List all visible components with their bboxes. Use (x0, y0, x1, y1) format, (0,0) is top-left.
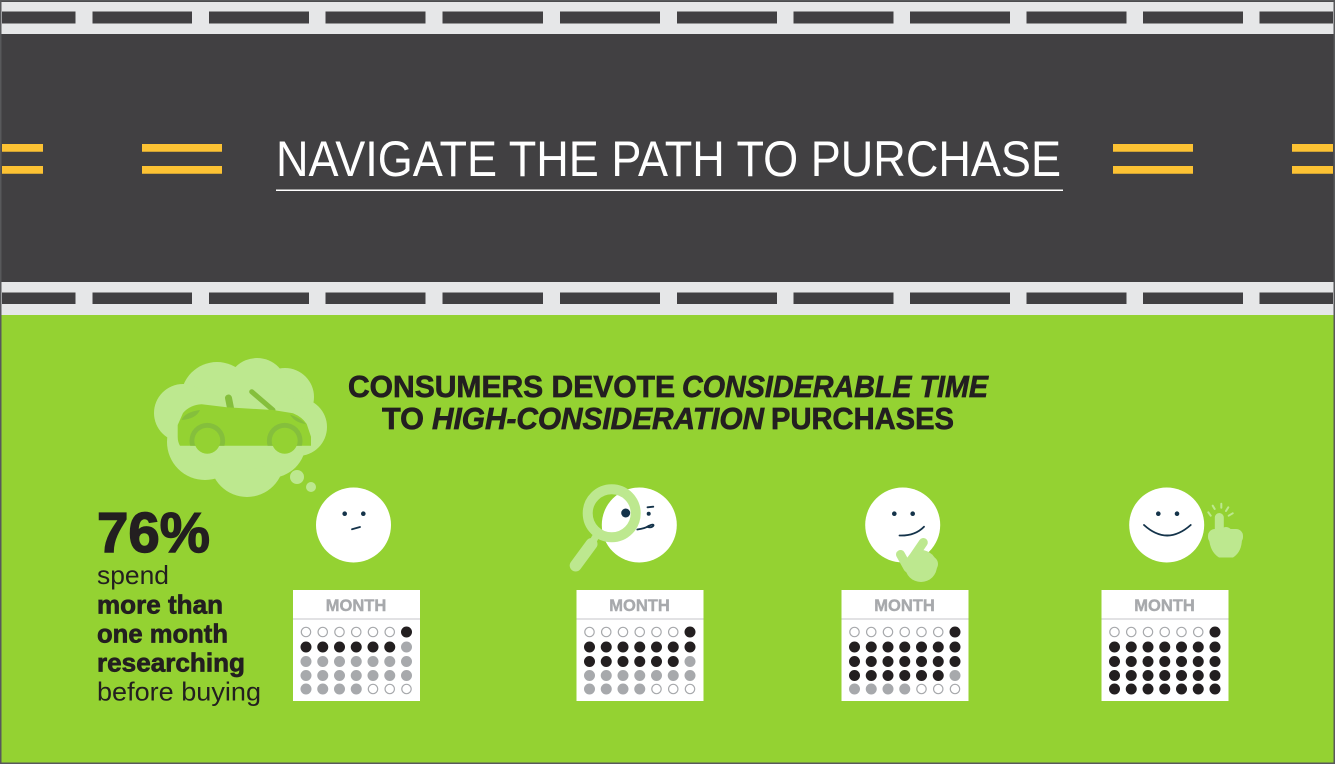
statistic: 76%: one month (97, 618, 228, 648)
top road edge stripe (0, 2, 1335, 34)
calendar 3: MONTH (874, 597, 935, 615)
yellow centre lines (2, 144, 1333, 174)
heading: CONSIDERABLE TIME (682, 369, 989, 404)
green background panel (0, 315, 1335, 764)
calendar 3 (842, 590, 968, 701)
road panel (0, 0, 1335, 315)
calendar 1: MONTH (326, 597, 386, 615)
statistic: 76%: more than (97, 590, 223, 620)
statistic: 76% (97, 501, 261, 706)
title: NAVIGATE THE PATH TO PURCHASE (276, 131, 1061, 187)
face 4: big smile with tapping hand (1129, 488, 1243, 562)
heading (348, 369, 989, 436)
icon: hand (900, 542, 938, 582)
face 1: thinking (316, 488, 391, 562)
calendar 1 (293, 590, 420, 701)
calendar 4 (1102, 590, 1228, 701)
bottom road edge stripe (0, 282, 1335, 315)
car (178, 392, 311, 459)
statistic: 76%: researching (97, 648, 245, 678)
heading: HIGH-CONSIDERATION (432, 401, 765, 436)
heading: CONSUMERS DEVOTE (348, 369, 675, 404)
thought cloud with car (154, 358, 327, 497)
statistic: 76%: spend (97, 560, 169, 590)
calendar 2 (576, 590, 704, 701)
statistic: 76%: before buying (97, 676, 261, 706)
cloud (154, 358, 327, 497)
face 3: pointing hand (865, 488, 940, 582)
icon: tapping hand (1208, 504, 1243, 558)
face 2: magnifying glass (576, 488, 677, 566)
heading: PURCHASES (771, 401, 954, 436)
calendar 4: MONTH (1134, 597, 1195, 615)
calendar 2: MONTH (609, 597, 670, 615)
statistic: 76%: 76% (97, 501, 210, 565)
heading: TO (382, 401, 424, 436)
